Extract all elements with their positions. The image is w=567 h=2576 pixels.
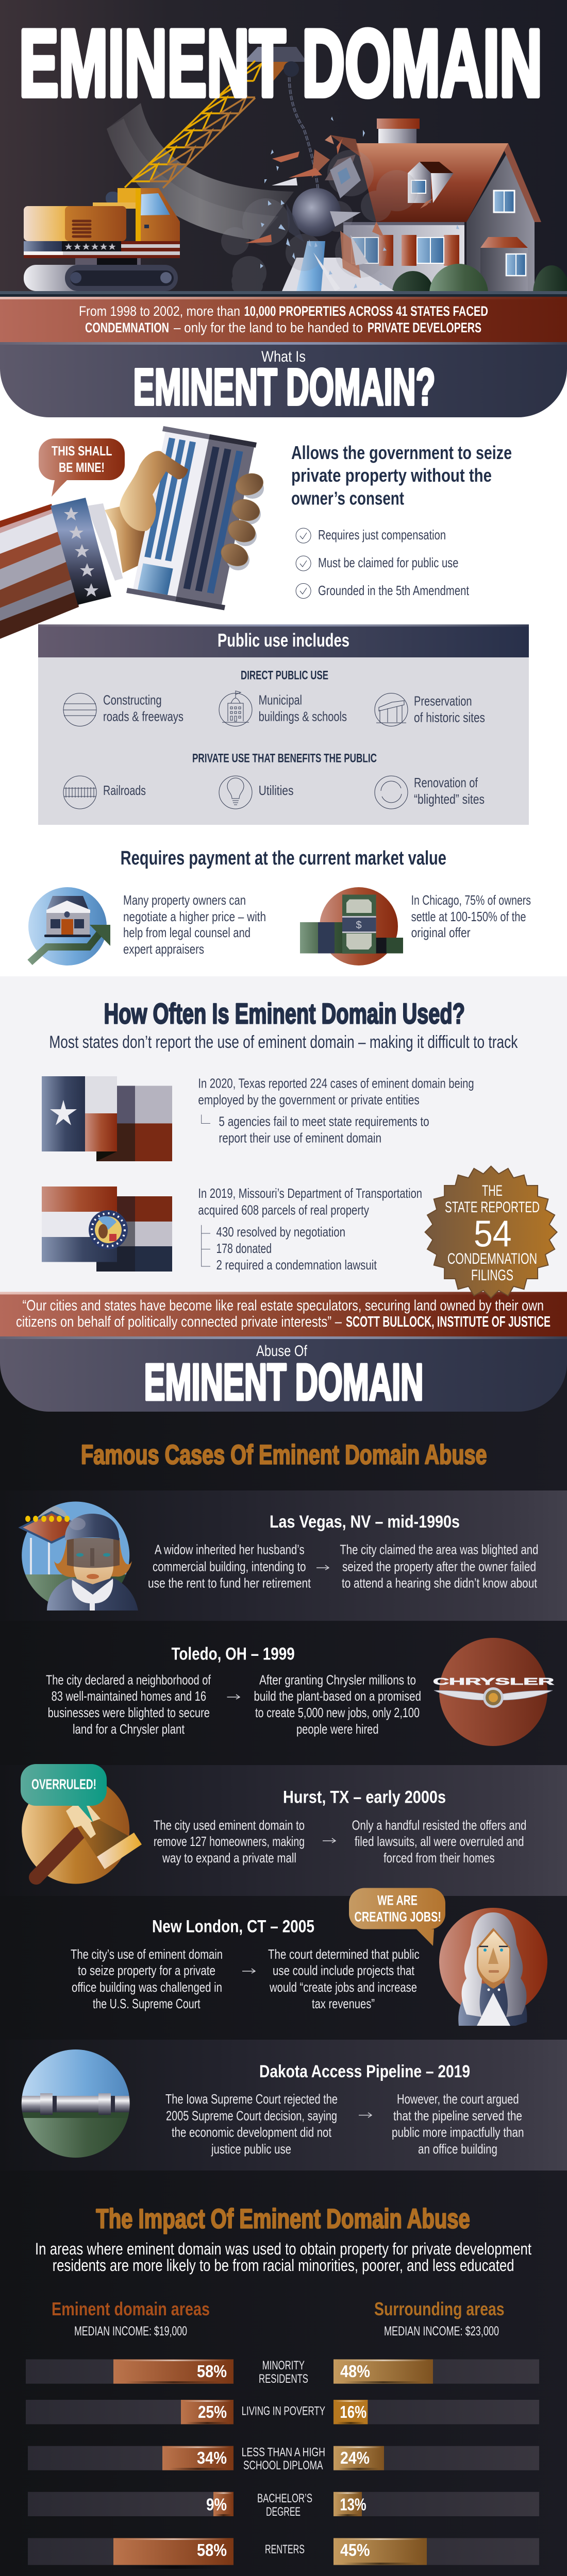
checklist (296, 527, 470, 599)
speech bubble: overruled (21, 1764, 107, 1823)
section header: abuse of eminent domain: Abuse Of (256, 1343, 308, 1360)
item: historic sites: of historic sites (414, 710, 485, 725)
row: minority residents (26, 2359, 539, 2386)
item: historic sites: Preservation (414, 693, 472, 709)
case text left: The city’s use of eminent domain (71, 1946, 223, 1962)
chart legend: eminent domain areas: Eminent domain areas (52, 2298, 210, 2319)
flag: texas (42, 1076, 172, 1161)
row: bachelor's degree: 13% (340, 2495, 366, 2514)
smoke clouds (221, 150, 418, 296)
chart legend: surrounding areas (374, 2298, 505, 2338)
section header: abuse of eminent domain (0, 1336, 567, 1412)
text: negotiate higher price: Many property owners can (123, 892, 246, 908)
item: utilities: Utilities (259, 783, 294, 798)
quote banner (0, 1292, 567, 1337)
row: less than high school diploma: SCHOOL DIPLOMA (243, 2459, 323, 2472)
case: new london (71, 1888, 547, 2026)
ground strip (0, 291, 567, 297)
row: bachelor's degree: DEGREE (266, 2505, 301, 2519)
case text left: 2005 Supreme Court decision, saying (166, 2108, 337, 2124)
path and water (282, 241, 394, 291)
text: texas: 5 agencies fail to meet state requirements to (219, 1113, 429, 1129)
row: living in poverty (26, 2400, 539, 2424)
item: railroads (63, 776, 146, 809)
row: bachelor's degree (28, 2492, 539, 2519)
speech bubble: this shall be mine: BE MINE! (59, 460, 105, 475)
row: less than high school diploma: LESS THAN A HIGH (242, 2446, 325, 2460)
case heading: Hurst, TX – early 2000s (283, 1788, 446, 1807)
text: texas (198, 1076, 474, 1145)
case text left: 83 well-maintained homes and 16 (52, 1688, 206, 1704)
case text left (154, 1817, 305, 1866)
portrait: judge (439, 1908, 547, 2026)
case heading: New London, CT – 2005 (152, 1917, 314, 1937)
text: missouri: acquired 608 parcels of real property (198, 1202, 369, 1218)
panel: hurst case (0, 1764, 567, 1896)
item: roads: roads & freeways (103, 709, 184, 724)
sleeve (0, 504, 79, 639)
portrait: widow with casino sign (21, 1499, 138, 1611)
speech bubble: this shall be mine: THIS SHALL (52, 443, 112, 459)
case heading: Dakota Access Pipeline – 2019 (259, 2062, 470, 2081)
case text left: remove 127 homeowners, making (154, 1834, 305, 1849)
icon: pipeline (21, 2048, 131, 2159)
definition text (291, 442, 512, 509)
crane boom lattice (125, 61, 261, 188)
text: chicago: In Chicago, 75% of owners (411, 892, 531, 908)
check item 1: Requires just compensation (318, 527, 446, 543)
icon: money stacks (300, 887, 403, 965)
intro text (79, 303, 488, 335)
case text left: to seize property for a private (78, 1963, 215, 1978)
arrow (359, 2113, 372, 2117)
star cuff (51, 498, 111, 605)
panel: how often is eminent domain used (0, 976, 567, 1292)
row: bachelor's degree: BACHELOR’S (257, 2492, 312, 2505)
case text left: businesses were blighted to secure (48, 1705, 210, 1720)
row: living in poverty: 25% (198, 2402, 227, 2421)
text: negotiate higher price (123, 892, 266, 957)
row: less than high school diploma: 34% (197, 2448, 227, 2467)
text: chicago: settle at 100-150% of the (411, 909, 526, 924)
hero background (0, 0, 567, 292)
row: renters: RENTERS (265, 2543, 305, 2556)
arrow (316, 1565, 329, 1570)
house (343, 118, 541, 291)
text: missouri: 178 donated (216, 1241, 272, 1256)
case text right: use could include projects that (273, 1963, 415, 1978)
case heading: Toledo, OH – 1999 (171, 1645, 295, 1664)
heading: requires payment: Requires payment at the current market value (121, 848, 446, 869)
hand forearm (105, 501, 147, 573)
item: railroads: Railroads (103, 783, 146, 798)
badge: 54 condemnation filings: FILINGS (471, 1267, 513, 1284)
case text right (352, 1817, 526, 1866)
section header: what is eminent domain (0, 342, 567, 417)
debris shards (245, 116, 459, 291)
crane cab and body (24, 188, 180, 258)
item: municipal buildings: Municipal (259, 692, 302, 708)
row: minority residents: 48% (340, 2362, 370, 2381)
case text right: tax revenues” (312, 1996, 375, 2011)
case text left: office building was challenged in (72, 1979, 222, 1995)
chart legend: eminent domain areas: MEDIAN INCOME: $19,000 (74, 2324, 187, 2338)
case text right: would “create jobs and increase (269, 1979, 417, 1995)
icon: chrysler logo: CHRYSLER (433, 1676, 554, 1687)
intro text: 10,000 PROPERTIES ACROSS 41 STATES FACED (244, 303, 488, 319)
wrecking ball (292, 188, 341, 236)
badge: 54 condemnation filings: 54 (474, 1214, 512, 1255)
chart legend: surrounding areas: MEDIAN INCOME: $23,000 (384, 2324, 499, 2338)
text: negotiate higher price: help from legal counsel and (123, 925, 251, 940)
case text left: use the rent to fund her retirement (148, 1575, 311, 1591)
case text left (71, 1946, 223, 2011)
item: historic sites (375, 693, 485, 726)
text: chicago: original offer (411, 925, 471, 940)
crane chain (289, 77, 318, 190)
row: renters (28, 2538, 539, 2569)
case text left: way to expand a private mall (162, 1850, 296, 1866)
item: blighted sites (375, 775, 485, 809)
text: missouri (198, 1185, 422, 1273)
definition text: private property without the (291, 465, 492, 486)
icon: chrysler logo (433, 1638, 554, 1746)
case text right: that the pipeline served the (393, 2108, 522, 2124)
arrow (323, 1838, 336, 1843)
icon: gavel (22, 1776, 142, 1884)
speech bubble: creating jobs (349, 1888, 445, 1946)
case text right (254, 1672, 421, 1737)
case text right: However, the court argued (397, 2091, 519, 2107)
row: minority residents: MINORITY (262, 2359, 305, 2372)
row: minority residents: 58% (197, 2362, 227, 2381)
case text right: The court determined that public (268, 1946, 420, 1962)
case text left: A widow inherited her husband’s (155, 1542, 305, 1557)
definition text: owner’s consent (291, 487, 404, 509)
intro text: – only for the land to be handed to (174, 320, 363, 335)
speech bubble: this shall be mine (39, 438, 125, 497)
row: bachelor's degree: 9% (206, 2495, 227, 2514)
check item 2: Must be claimed for public use (318, 555, 459, 570)
building (126, 426, 259, 610)
speech bubble: overruled: OVERRULED! (31, 1776, 96, 1792)
check item 1 (296, 527, 446, 543)
case text right (268, 1946, 420, 2011)
item: roads (63, 692, 184, 726)
case text left (165, 2091, 338, 2157)
shirt cuff (87, 503, 123, 581)
case: toledo (46, 1638, 554, 1746)
illustration: sleeve hand grabbing building (0, 426, 266, 639)
hook block (247, 47, 305, 81)
case text right: public more impactfully than (392, 2125, 524, 2140)
heading: what is: What Is (261, 348, 306, 365)
case text right: filed lawsuits, all were overruled and (355, 1834, 524, 1849)
item: blighted sites: “blighted” sites (414, 791, 485, 807)
case text right: After granting Chrysler millions to (259, 1672, 416, 1688)
arrow (227, 1694, 240, 1699)
text: texas: employed by the government or private entities (198, 1092, 420, 1108)
row: less than high school diploma (28, 2446, 539, 2472)
row: living in poverty: LIVING IN POVERTY (242, 2404, 325, 2418)
case text left (148, 1542, 311, 1591)
case text left: The city used eminent domain to (154, 1817, 305, 1833)
text: impact intro (35, 2240, 531, 2275)
text: missouri: In 2019, Missouri’s Department of Transportation (198, 1185, 422, 1201)
case text right: people were hired (296, 1721, 378, 1737)
case text left: the U.S. Supreme Court (93, 1996, 201, 2011)
check item 3: Grounded in the 5th Amendment (318, 583, 470, 598)
case text right: forced from their homes (383, 1850, 495, 1866)
intro text: From 1998 to 2002, more than (79, 303, 240, 319)
text: missouri: 430 resolved by negotiation (216, 1224, 345, 1240)
bushes (392, 264, 567, 291)
row: less than high school diploma: 24% (340, 2448, 370, 2467)
case text left: The city declared a neighborhood of (46, 1672, 211, 1688)
quote banner: citizens on behalf of politically connected private interests” – (16, 1314, 342, 1330)
intro text: PRIVATE DEVELOPERS (368, 320, 481, 335)
case text left: the economic development did not (172, 2125, 332, 2140)
case heading: Las Vegas, NV – mid-1990s (270, 1512, 460, 1532)
text: negotiate higher price: negotiate a higher price – with (123, 909, 266, 924)
thumb and palm (120, 451, 188, 531)
row: living in poverty: 16% (340, 2402, 366, 2421)
badge: 54 condemnation filings: THE (482, 1182, 503, 1199)
case text left: justice public use (211, 2141, 291, 2157)
speech bubble: creating jobs: WE ARE (377, 1893, 418, 1908)
motion swoosh (107, 103, 294, 240)
case text left (46, 1672, 211, 1737)
case text right (392, 2091, 524, 2157)
crane tracks (24, 258, 178, 291)
text: texas: In 2020, Texas reported 224 cases of eminent domain being (198, 1076, 474, 1091)
badge: 54 condemnation filings (425, 1166, 557, 1298)
flag: missouri (42, 1187, 172, 1272)
subheading: private use: PRIVATE USE THAT BENEFITS THE PUBLIC (192, 751, 377, 766)
case text left: commercial building, intending to (153, 1559, 306, 1574)
panel: las vegas case (0, 1490, 567, 1621)
intro banner (0, 297, 567, 343)
check item 3 (296, 583, 470, 599)
text: missouri: 2 required a condemnation lawsuit (216, 1257, 377, 1273)
item: blighted sites: Renovation of (414, 775, 478, 790)
case text right: an office building (418, 2141, 497, 2157)
case text left: The Iowa Supreme Court rejected the (165, 2091, 338, 2107)
case text right: to create 5,000 new jobs, only 2,100 (255, 1705, 420, 1720)
case text left: land for a Chrysler plant (73, 1721, 185, 1737)
row: renters: 45% (340, 2540, 370, 2560)
row: minority residents: RESIDENTS (259, 2372, 308, 2386)
panel: public use includes (38, 624, 529, 825)
case text right: build the plant-based on a promised (254, 1688, 421, 1704)
illustration: crane and wrecking ball hitting house (24, 47, 567, 291)
text: texas: report their use of eminent domain (219, 1130, 381, 1145)
row: renters: 58% (197, 2540, 227, 2560)
check item 2 (296, 555, 459, 571)
text: negotiate higher price: expert appraisers (123, 941, 204, 957)
speech bubble: creating jobs: CREATING JOBS! (355, 1909, 441, 1925)
dark section background (0, 1337, 567, 2576)
case text right (340, 1542, 538, 1591)
bar chart: demographics comparison (26, 2359, 539, 2569)
item: roads: Constructing (103, 692, 162, 708)
panel heading: Public use includes (218, 630, 349, 651)
definition text: Allows the government to seize (291, 442, 512, 463)
fingers (218, 470, 266, 570)
intro text: CONDEMNATION (85, 320, 169, 335)
panel: dakota access pipeline case (0, 2040, 567, 2171)
chart legend: eminent domain areas (52, 2298, 210, 2338)
icon: house with rising arrow (28, 887, 110, 965)
item: utilities (219, 776, 294, 809)
item: municipal buildings: buildings & schools (259, 709, 347, 724)
text: chicago (411, 892, 531, 940)
icon: money stacks: $ (356, 920, 362, 931)
item: municipal buildings (219, 691, 347, 726)
subheading: direct public use: DIRECT PUBLIC USE (241, 669, 328, 683)
arrow (242, 1969, 255, 1973)
chart legend: surrounding areas: Surrounding areas (374, 2298, 505, 2319)
